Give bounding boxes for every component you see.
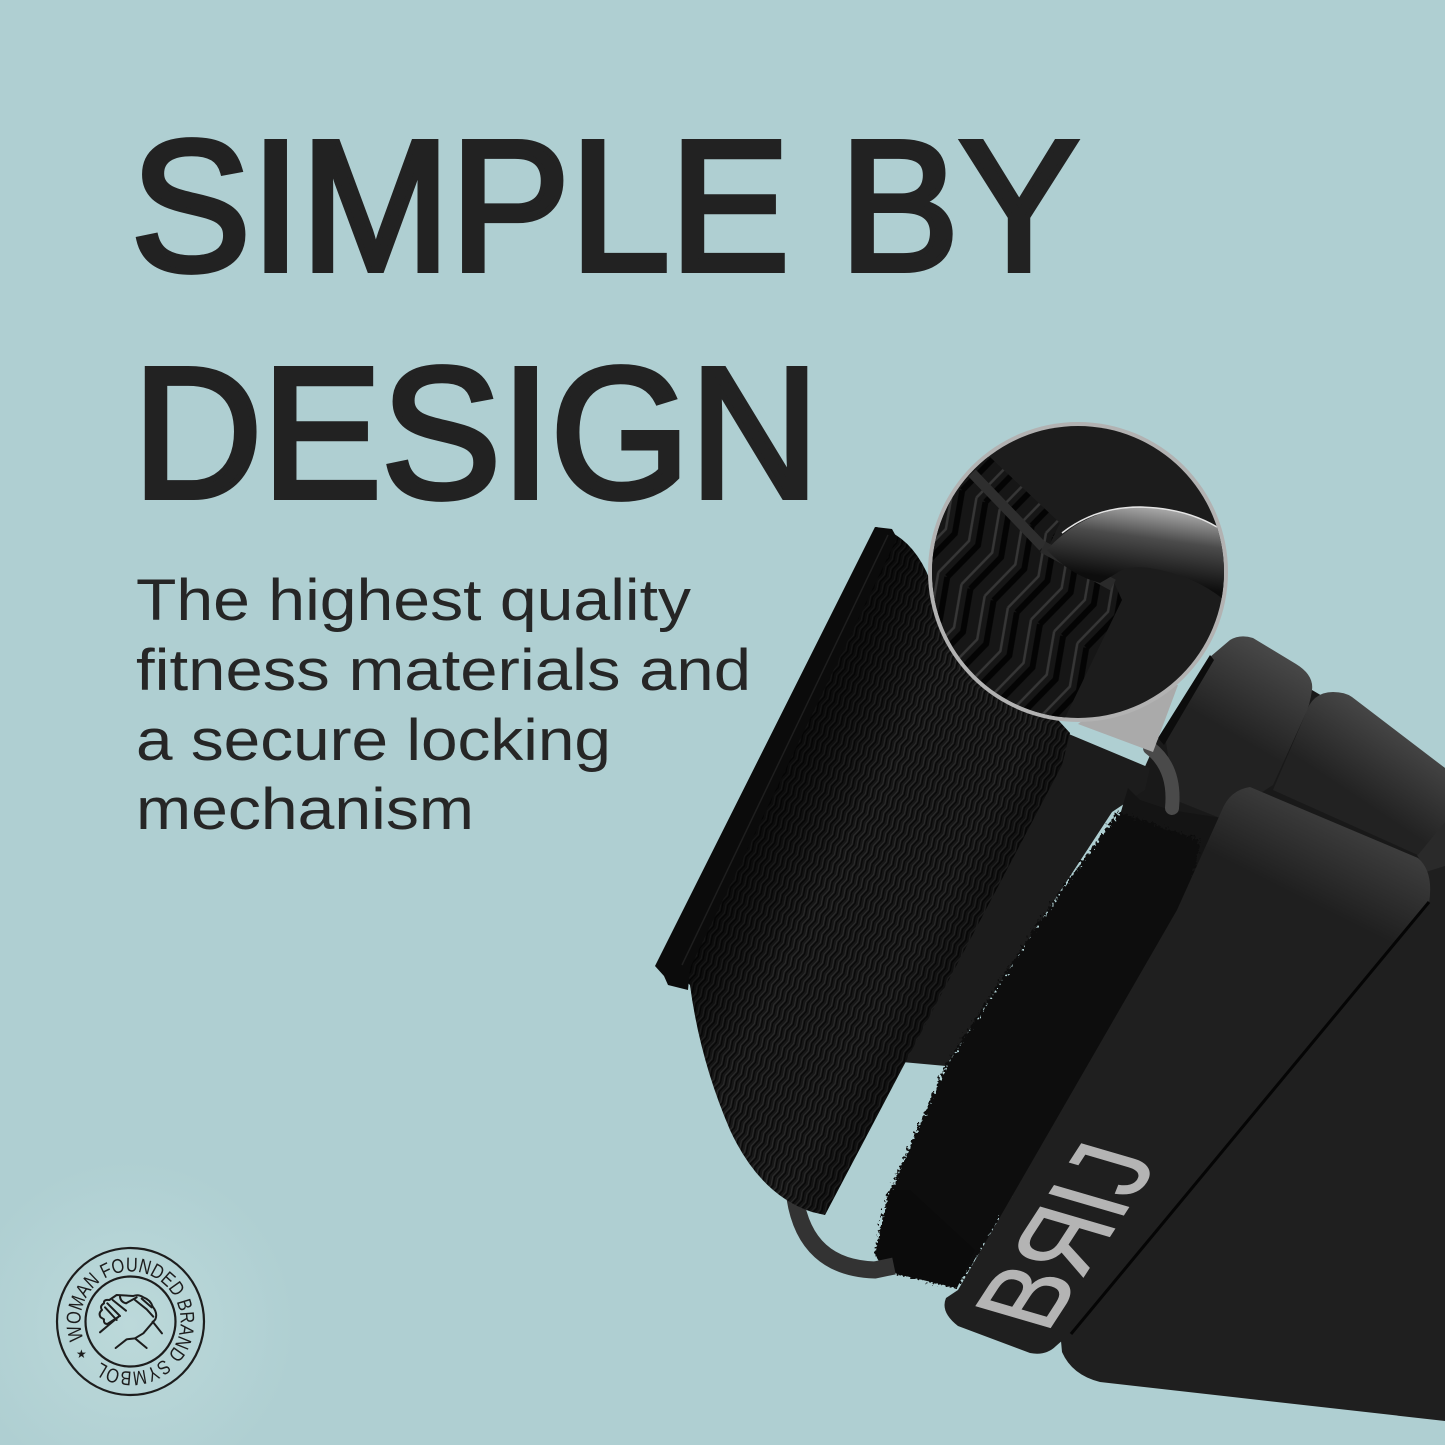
front logo plate [944,787,1430,1354]
centre pad [902,732,1150,1066]
binding highlight line [682,535,888,965]
badge outer ring [57,1248,204,1395]
woman founded badge [56,1246,206,1396]
badge star: ★ [76,1347,87,1361]
title: DESIGN [133,330,819,537]
lower right weight block [1060,866,1445,1421]
badge glow [0,1150,310,1445]
woven strap [680,527,1070,1215]
body text: The highest quality [136,568,691,633]
body text: mechanism [136,777,474,842]
icon: clasped hands [100,1295,162,1348]
badge circular text: WOMAN FOUNDED BRAND SYMBOL [66,1258,194,1386]
body text: fitness materials and [136,638,751,703]
ring highlight [1062,507,1217,533]
badge inner ring [86,1276,176,1366]
magnified metal ring [1052,508,1224,598]
magnified weave [920,450,1122,722]
magnifier callout [920,420,1240,752]
lens ring [928,422,1228,722]
lens contents [932,426,1224,718]
shadow slit beside block 1 [1158,655,1214,745]
lower D ring [795,1198,894,1270]
title [131,103,1079,537]
velcro bottom end [876,1190,975,1288]
slit between plates [1071,902,1429,1334]
back weight block 1 [1166,636,1312,818]
magnified strap seam [972,473,1043,547]
back weight block 3 [1417,818,1445,880]
connector ring [1150,748,1173,808]
magnified gathered hem [1043,547,1113,585]
body text [136,568,751,842]
velcro gathered end [1120,788,1222,890]
product: ankle weight strap [655,527,1445,1421]
title: SIMPLE BY [131,103,1079,310]
dark backing behind blocks [1130,657,1445,885]
logo: BЯIJ [949,1131,1182,1341]
strap binding edge [655,527,897,990]
velcro strip [875,812,1200,1288]
body text: a secure locking [136,708,611,773]
back weight block 2 [1273,692,1445,855]
callout pointer [1078,685,1178,752]
